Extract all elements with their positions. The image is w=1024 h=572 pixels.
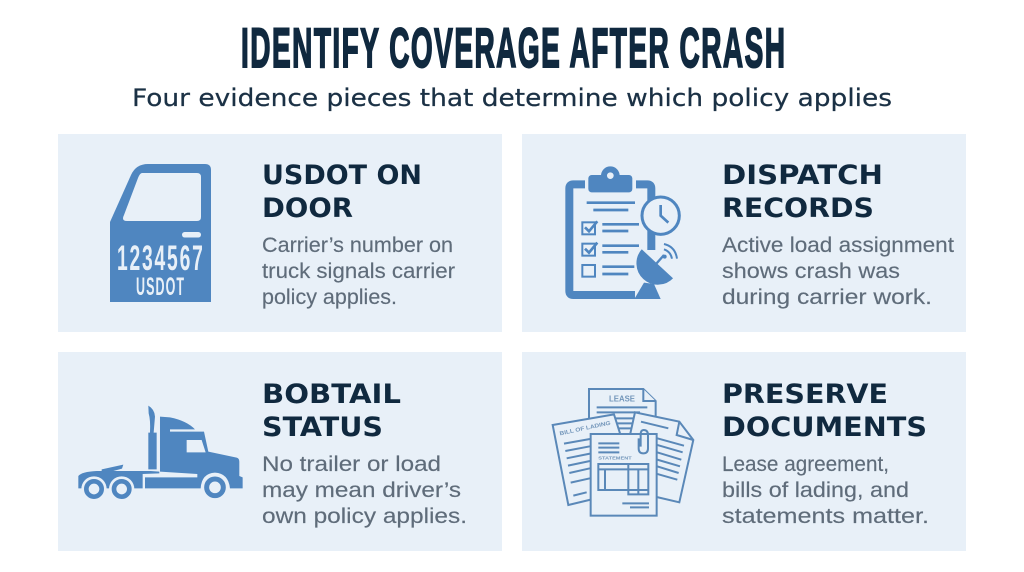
panel: preserve documents [522, 352, 966, 551]
text block: Lease agreement, [722, 453, 889, 476]
heading: DOCUMENTS [722, 412, 927, 443]
heading: BOBTAIL [262, 379, 401, 410]
text block: No trailer or load [262, 453, 441, 476]
text block: policy applies. [262, 286, 397, 309]
heading: PRESERVE [722, 379, 888, 410]
text block: own policy applies. [262, 505, 467, 528]
icon: stacked documents [553, 389, 693, 516]
heading [722, 160, 883, 224]
heading [262, 160, 422, 224]
text block [262, 453, 467, 528]
panel: bobtail status [58, 352, 502, 551]
heading [262, 379, 401, 443]
text block: Active load assignment [722, 234, 954, 257]
text block: statements matter. [722, 505, 929, 528]
icon: truck door: USDOT [136, 273, 184, 301]
text block [722, 234, 954, 309]
text block: shows crash was [722, 260, 900, 283]
heading: DISPATCH [722, 160, 883, 191]
icon: stacked documents: BILL OF LADING [559, 420, 612, 437]
icon: bobtail truck [78, 406, 243, 502]
text block [722, 453, 929, 528]
panel: dispatch records [522, 134, 966, 332]
heading: DOOR [262, 193, 353, 224]
icon: clipboard with clock and satellite dish [569, 166, 679, 299]
panel: USDOT on door [58, 134, 502, 332]
icon: truck door: 1234567 [117, 238, 203, 277]
title: IDENTIFY COVERAGE AFTER CRASH [241, 18, 785, 80]
text block: truck signals carrier [262, 260, 455, 283]
icon: stacked documents: LEASE [609, 394, 635, 404]
heading: STATUS [262, 412, 383, 443]
icon: stacked documents: STATEMENT [598, 456, 632, 462]
heading: RECORDS [722, 193, 874, 224]
text block: Carrier’s number on [262, 234, 453, 257]
icon: truck door [110, 164, 211, 302]
text block: bills of lading, and [722, 479, 909, 502]
heading [722, 379, 927, 443]
text block: during carrier work. [722, 286, 932, 309]
subtitle: Four evidence pieces that determine which policy applies [132, 84, 892, 112]
text block: may mean driver’s [262, 479, 461, 502]
heading: USDOT ON [262, 160, 422, 191]
text block [262, 234, 455, 309]
